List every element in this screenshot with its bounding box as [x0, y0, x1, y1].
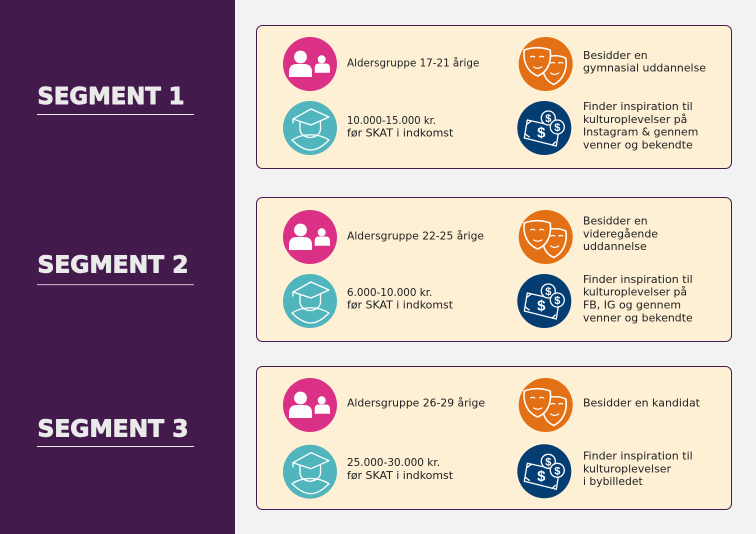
text: income	[347, 457, 453, 482]
text: inspiration: FB, IG og gennem	[583, 300, 681, 312]
text: inspiration: Finder inspiration til	[583, 101, 693, 113]
icon: graduate	[283, 101, 337, 155]
text: income: før SKAT i indkomst	[347, 470, 453, 482]
text: inspiration	[583, 274, 693, 324]
text: income	[347, 115, 453, 140]
text: income: 6.000-10.000 kr.	[347, 287, 432, 299]
heading: segment 2: SEGMENT 2	[38, 253, 188, 279]
icon: graduate	[283, 445, 337, 499]
text: inspiration: Finder inspiration til	[583, 450, 693, 462]
text: inspiration	[583, 101, 698, 151]
text: education: Besidder en	[583, 50, 648, 62]
text: income: 25.000-30.000 kr.	[347, 457, 440, 469]
text: age group: Aldersgruppe 26-29 årige	[347, 397, 485, 410]
text: income: 10.000-15.000 kr.	[347, 115, 436, 127]
icon: money	[517, 101, 571, 155]
heading: segment 3: SEGMENT 3	[38, 417, 188, 443]
icon: theatre masks	[519, 210, 573, 264]
text: education: Besidder en	[583, 215, 648, 227]
text: inspiration: venner og bekendte	[583, 312, 693, 324]
text: education: uddannelse	[583, 241, 647, 253]
text: inspiration	[583, 450, 693, 488]
icon: money	[517, 444, 571, 498]
heading: segment 1: SEGMENT 1	[38, 84, 184, 110]
text: age group: Aldersgruppe 17-21 årige	[347, 56, 479, 69]
icon: money	[517, 274, 571, 328]
panel: segment 3	[256, 366, 732, 510]
icon: graduate	[283, 274, 337, 328]
panel: segment 2	[256, 198, 732, 342]
text: inspiration: kulturoplevelser på	[583, 286, 687, 299]
text: inspiration: Instagram & gennem	[583, 127, 698, 139]
text: inspiration: kulturoplevelser på	[583, 113, 687, 126]
left sidebar	[0, 0, 235, 534]
text: education: videregående	[583, 227, 658, 240]
text: inspiration: kulturoplevelser	[583, 464, 672, 476]
text: income	[347, 287, 453, 312]
text: income: før SKAT i indkomst	[347, 128, 453, 140]
text: inspiration: venner og bekendte	[583, 139, 693, 151]
text: education	[583, 215, 658, 253]
panel: segment 1	[256, 26, 732, 168]
text: education: gymnasial uddannelse	[583, 63, 706, 75]
icon: people	[283, 37, 337, 91]
text: inspiration: i bybilledet	[583, 476, 643, 488]
text: education	[583, 50, 706, 75]
icon: people	[283, 378, 337, 432]
icon: people	[283, 210, 337, 264]
text: income: før SKAT i indkomst	[347, 300, 453, 312]
text: inspiration: Finder inspiration til	[583, 274, 693, 286]
icon: theatre masks	[519, 37, 573, 91]
icon: theatre masks	[519, 378, 573, 432]
text: age group: Aldersgruppe 22-25 årige	[347, 229, 484, 242]
text: education: Besidder en kandidat	[583, 398, 700, 410]
